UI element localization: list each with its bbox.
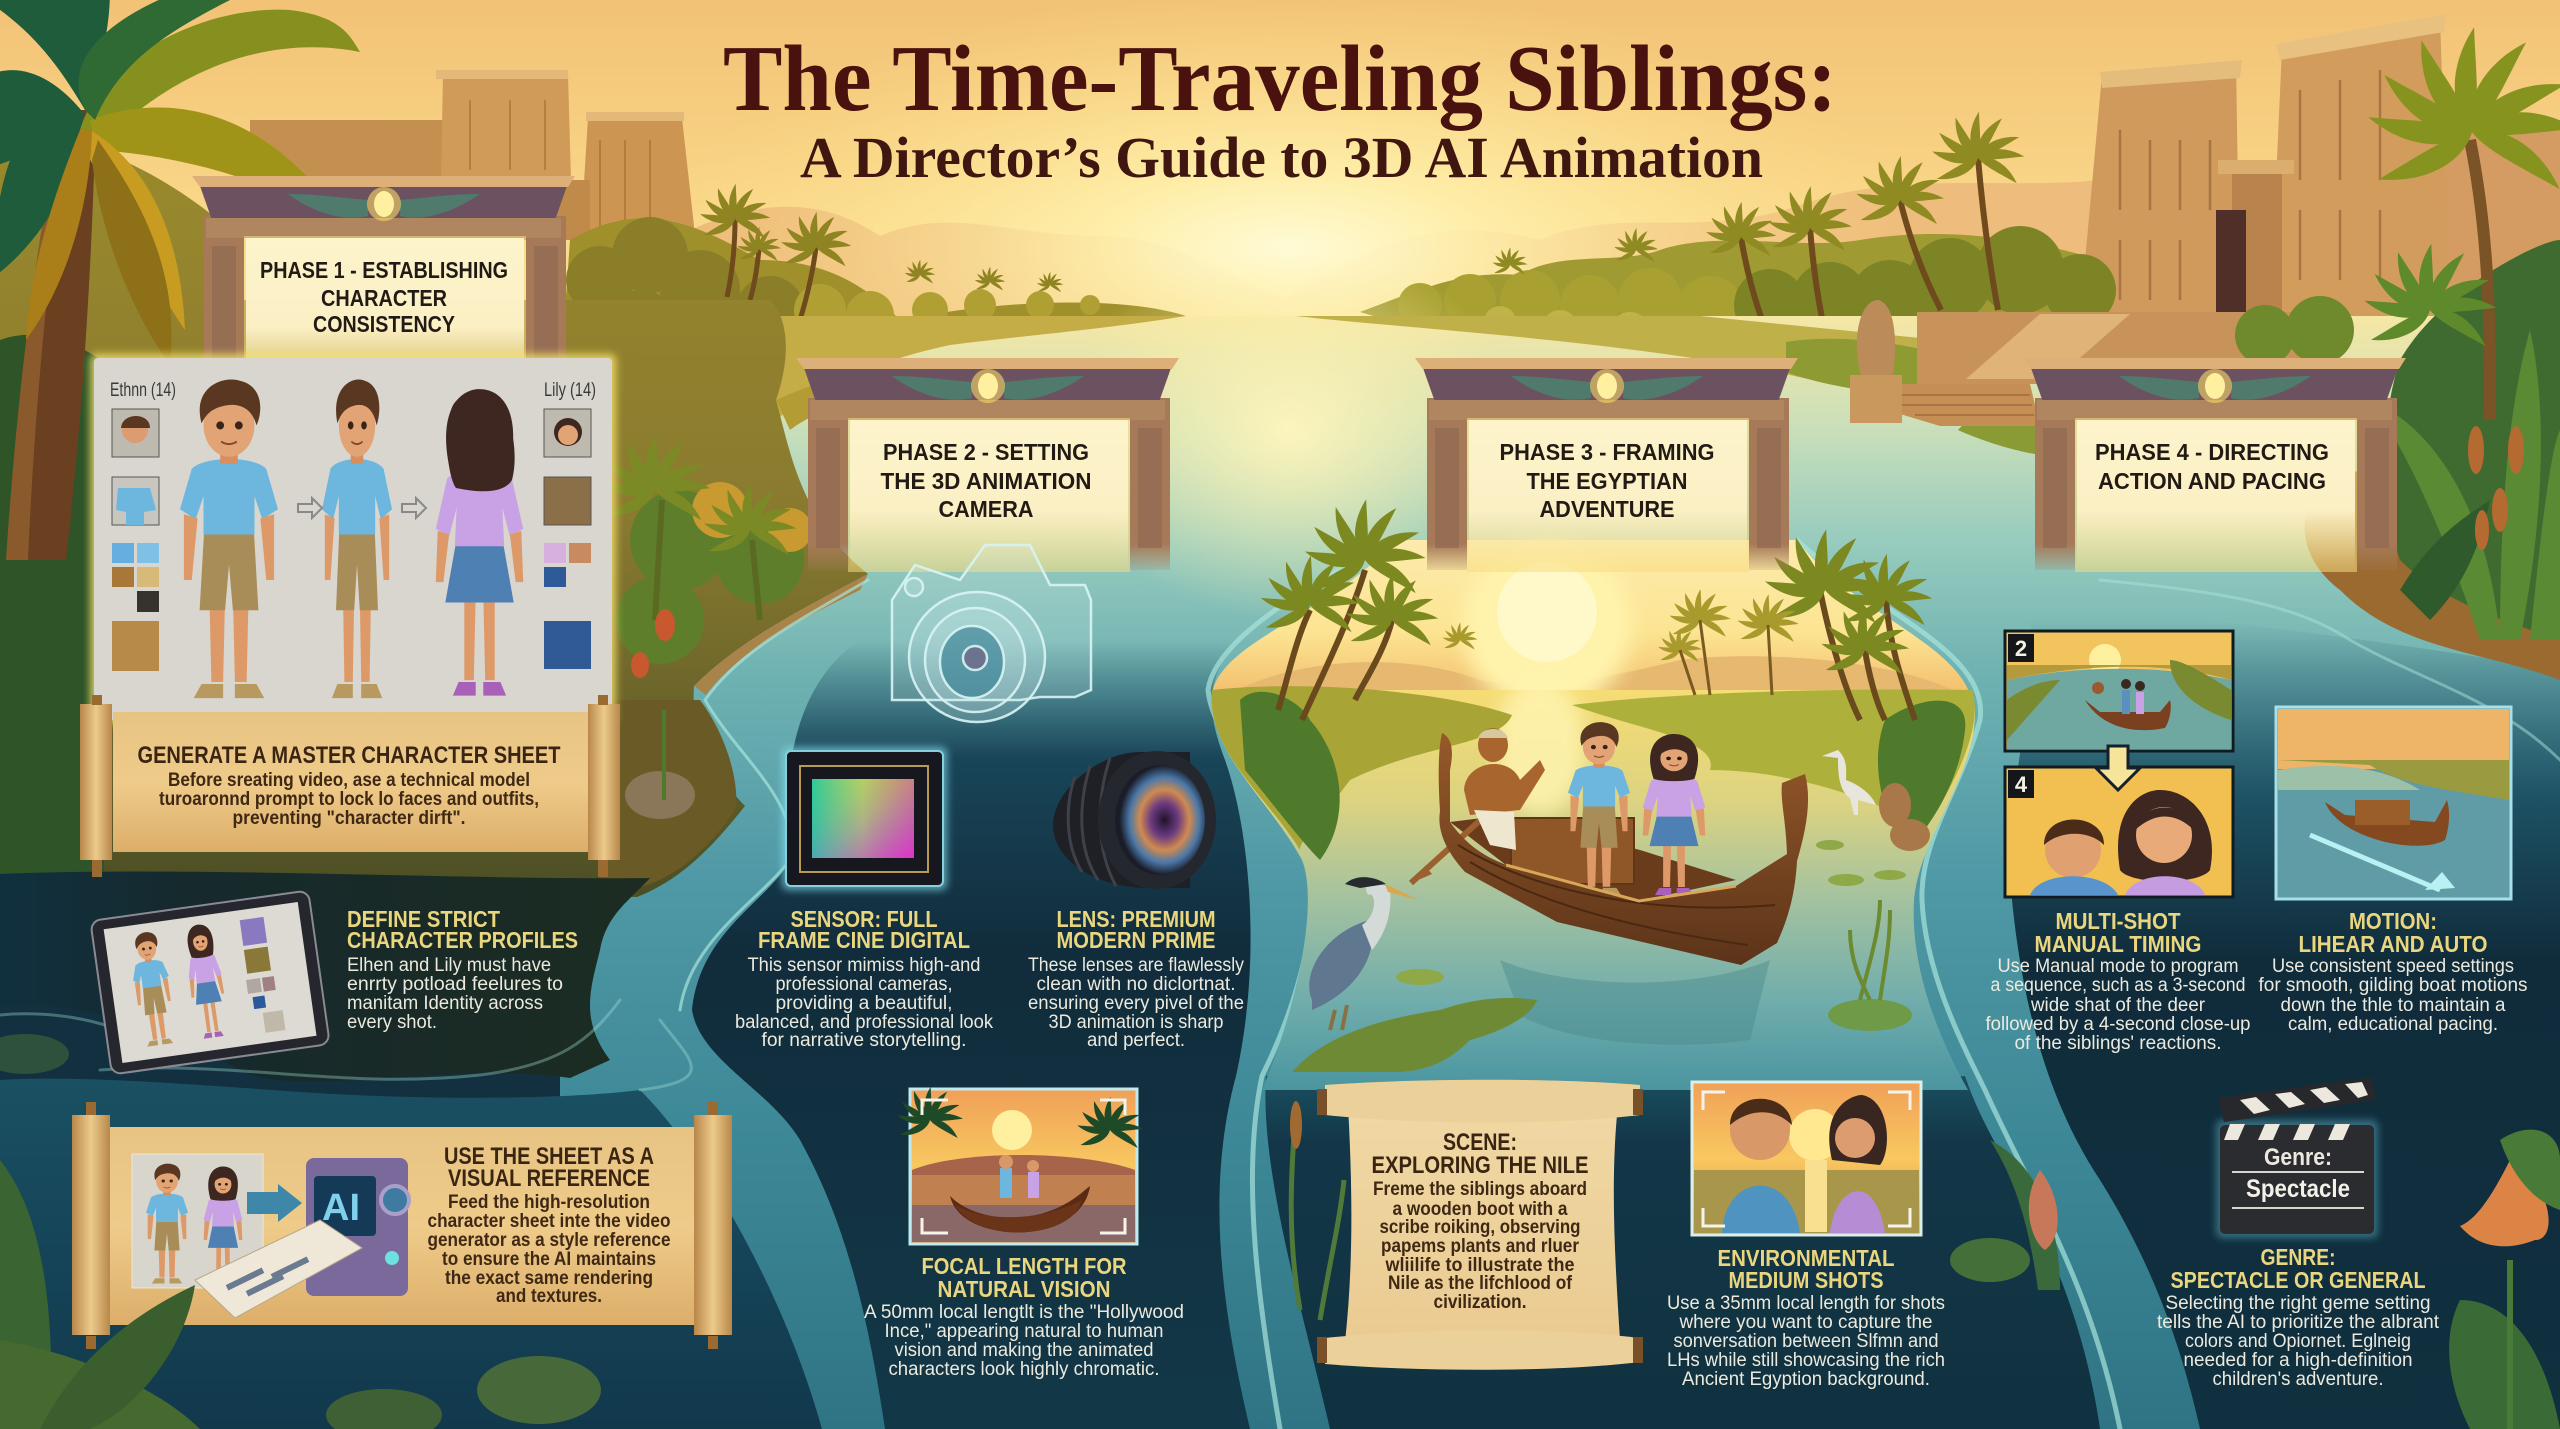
text: genre: needed for a high-definition bbox=[2184, 1350, 2412, 1371]
text: focal length: FOCAL LENGTH FOR bbox=[922, 1253, 1127, 1279]
text: multi-shot manual timing: followed by a 4-second close-up bbox=[1986, 1014, 2250, 1035]
far banks bbox=[760, 316, 2040, 455]
text: focal length: NATURAL VISION bbox=[938, 1276, 1110, 1302]
crocodile bbox=[1292, 998, 1537, 1072]
AI machine: AI bbox=[322, 1187, 360, 1229]
temple platform and stairs bbox=[1850, 296, 2354, 426]
title: The Time-Traveling Siblings: bbox=[723, 27, 1837, 131]
text: sensor: providing a beautiful, bbox=[776, 993, 952, 1014]
gate: phase 4 bbox=[2023, 358, 2406, 572]
right land with plants bbox=[2305, 27, 2560, 680]
heron white bbox=[1822, 750, 1876, 815]
text: environmental medium shots: where you want to capture the bbox=[1679, 1312, 1932, 1333]
lower left water panel bbox=[0, 1079, 822, 1429]
text: define strict character profiles: manitam Identity across bbox=[347, 993, 543, 1014]
scroll text: Feed the high-resolution bbox=[448, 1192, 650, 1213]
text: sensor: FRAME CINE DIGITAL bbox=[758, 927, 970, 953]
phase 4 heading: ACTION AND PACING bbox=[2098, 468, 2326, 494]
text: define strict character profiles: CHARACTER PROFILES bbox=[347, 927, 578, 953]
scroll: scene exploring the Nile: Freme the siblings aboard bbox=[1373, 1179, 1587, 1200]
text: genre: SPECTACLE OR GENERAL bbox=[2170, 1267, 2426, 1293]
text: motion: calm, educational pacing. bbox=[2288, 1014, 2498, 1035]
text: lens: MODERN PRIME bbox=[1056, 927, 1216, 953]
text: environmental medium shots: MEDIUM SHOTS bbox=[1728, 1267, 1884, 1293]
phase 2 heading: CAMERA bbox=[938, 496, 1034, 522]
scroll: generate a master character sheet: preventing "character dirft". bbox=[232, 808, 466, 829]
lily pads and reeds bbox=[1396, 840, 1912, 1031]
reference swatches bbox=[112, 409, 591, 671]
AI machine bbox=[195, 1158, 409, 1318]
text: define strict character profiles bbox=[347, 906, 578, 1033]
text: motion: down the thle to maintain a bbox=[2280, 995, 2506, 1016]
scene banks bbox=[1211, 686, 1975, 860]
left land with jungle bbox=[0, 130, 945, 897]
scroll text: VISUAL REFERENCE bbox=[448, 1165, 650, 1192]
text: genre: GENRE: bbox=[2260, 1244, 2336, 1270]
text: motion bbox=[2258, 908, 2528, 1035]
text: environmental medium shots: LHs while still showcasing the rich bbox=[1667, 1350, 1945, 1371]
text: environmental medium shots: Ancient Egyption background. bbox=[1682, 1369, 1930, 1390]
gate: phase 2 bbox=[796, 358, 1179, 572]
text: genre: colors and Opiornet. Eglneig bbox=[2185, 1331, 2411, 1352]
text: define strict character profiles: DEFINE STRICT bbox=[347, 906, 500, 932]
icon: sensor bbox=[782, 747, 947, 890]
text: lens: 3D animation is sharp bbox=[1048, 1012, 1224, 1033]
scroll: scene exploring the Nile: EXPLORING THE NILE bbox=[1372, 1152, 1588, 1179]
text: focal length: Ince," appearing natural to human bbox=[884, 1321, 1164, 1342]
boat reflection bbox=[1500, 960, 1770, 1045]
scene palms bbox=[1260, 499, 1932, 720]
text: sensor: SENSOR: FULL bbox=[790, 906, 938, 932]
text: genre: children's adventure. bbox=[2212, 1369, 2384, 1390]
scroll: generate a master character sheet: turoaronnd prompt to lock lo faces and outfits, bbox=[159, 789, 539, 810]
text: motion: Use consistent speed settings bbox=[2272, 956, 2514, 977]
big palm tree left bbox=[0, 0, 360, 560]
title bbox=[723, 27, 1837, 190]
arrow bbox=[247, 1184, 302, 1222]
text: define strict character profiles: every shot. bbox=[347, 1012, 437, 1033]
phase 1 heading: CHARACTER bbox=[321, 285, 447, 311]
scroll: scene exploring the Nile: wliilife to illustrate the bbox=[1385, 1255, 1574, 1276]
scroll: scene exploring the Nile: a wooden boot with a bbox=[1392, 1199, 1568, 1220]
text: genre bbox=[2157, 1244, 2440, 1390]
text: motion: for smooth, gilding boat motions bbox=[2258, 975, 2528, 996]
sun reflection on water bbox=[1060, 240, 1520, 620]
sheet thumbnail bbox=[132, 1154, 263, 1288]
storyboard frame 2 bbox=[2005, 631, 2233, 751]
text: multi-shot manual timing bbox=[1986, 908, 2250, 1054]
distant hills bbox=[690, 127, 2560, 330]
text: lens bbox=[1028, 906, 1244, 1051]
text: motion: LIHEAR AND AUTO bbox=[2298, 931, 2488, 957]
phase 2 heading bbox=[880, 439, 1092, 522]
text: genre: Selecting the right geme setting bbox=[2166, 1293, 2430, 1314]
dark panel column four bbox=[2010, 620, 2560, 1429]
text: define strict character profiles: enrrty potload feelures to bbox=[347, 974, 563, 995]
sun glow bbox=[650, 0, 1930, 510]
icon: holographic camera bbox=[892, 545, 1091, 722]
phase 4 heading: PHASE 4 - DIRECTING bbox=[2095, 439, 2329, 465]
phase 4 heading bbox=[2095, 439, 2329, 494]
phase 2 heading: THE 3D ANIMATION bbox=[880, 468, 1092, 494]
text: lens: clean with no diclortnat. bbox=[1036, 974, 1236, 995]
background: sky bbox=[0, 0, 2560, 360]
text: environmental medium shots: ENVIRONMENTAL bbox=[1718, 1245, 1894, 1271]
text: multi-shot manual timing: a sequence, such as a 3-second bbox=[1990, 975, 2246, 996]
hull bbox=[1439, 733, 1808, 965]
icon: clapperboard: Spectacle bbox=[2246, 1175, 2350, 1203]
dark panel column three bbox=[1265, 1076, 2100, 1429]
Nile river water bbox=[560, 316, 2560, 1429]
scroll text: the exact same rendering bbox=[445, 1268, 653, 1289]
scroll: generate a master character sheet bbox=[80, 695, 620, 877]
dark panel column two bbox=[692, 640, 1251, 1429]
scroll: generate a master character sheet: GENERATE A MASTER CHARACTER SHEET bbox=[138, 742, 561, 769]
view arrows bbox=[298, 498, 426, 518]
scribe rowing bbox=[1464, 728, 1545, 850]
scroll: scene exploring the Nile: Nile as the lifchlood of bbox=[1388, 1273, 1573, 1294]
text: multi-shot manual timing: MULTI-SHOT bbox=[2056, 908, 2180, 934]
scroll: use the sheet as a visual reference bbox=[72, 1102, 732, 1349]
image: environmental medium shot bbox=[1692, 1082, 1921, 1235]
scroll: scene exploring the Nile: papems plants and rluer bbox=[1381, 1236, 1580, 1257]
scroll: scene exploring the Nile: SCENE: bbox=[1443, 1129, 1517, 1156]
boat with siblings bbox=[1411, 722, 1808, 965]
text: focal length bbox=[864, 1253, 1184, 1380]
text: genre: tells the AI to prioritize the albrant bbox=[2157, 1312, 2440, 1333]
heron bbox=[1309, 877, 1419, 1030]
scroll: scene exploring the Nile: scribe roiking, observing bbox=[1380, 1217, 1580, 1238]
text: sensor bbox=[735, 906, 993, 1051]
phase 3 heading: THE EGYPTIAN bbox=[1526, 468, 1688, 494]
icon: lens bbox=[1053, 751, 1216, 889]
text: environmental medium shots bbox=[1667, 1245, 1945, 1390]
foreground plants and lily pads bbox=[0, 1034, 2560, 1429]
text: lens: and perfect. bbox=[1087, 1030, 1185, 1051]
text: sensor: balanced, and professional look bbox=[735, 1012, 993, 1033]
text: sensor: for narrative storytelling. bbox=[762, 1030, 966, 1051]
text: multi-shot manual timing: MANUAL TIMING bbox=[2034, 931, 2202, 957]
background vegetation and palms bbox=[560, 112, 2116, 400]
temple left bbox=[250, 70, 700, 280]
text: multi-shot manual timing: of the siblings' reactions. bbox=[2014, 1033, 2222, 1054]
panel: master character sheet: Lily (14) bbox=[544, 380, 596, 401]
arrow between frames bbox=[2096, 746, 2140, 790]
girl back view bbox=[436, 389, 523, 696]
scene sun bbox=[1462, 541, 1632, 711]
scene water bbox=[1211, 690, 1975, 1090]
storyboard frame 4 bbox=[2005, 767, 2233, 897]
boy side view bbox=[322, 379, 392, 698]
scene sky and sunset bbox=[1212, 540, 1970, 694]
icon: clapperboard bbox=[2216, 1077, 2378, 1238]
text: define strict character profiles: Elhen and Lily must have bbox=[347, 955, 551, 976]
panel: master character sheet bbox=[90, 354, 616, 724]
title: A Director’s Guide to 3D AI Animation bbox=[800, 125, 1763, 190]
scroll text: generator as a style reference bbox=[428, 1230, 670, 1251]
text: sensor: professional cameras, bbox=[776, 974, 952, 995]
river highlights bbox=[0, 540, 2560, 1429]
scroll text: and textures. bbox=[496, 1286, 602, 1307]
scroll text: character sheet inte the video bbox=[428, 1211, 670, 1232]
text: multi-shot manual timing: Use Manual mode to program bbox=[1998, 956, 2238, 977]
text: lens: LENS: PREMIUM bbox=[1056, 906, 1216, 932]
text: focal length: characters look highly chromatic. bbox=[888, 1359, 1160, 1380]
text: multi-shot manual timing: wide shat of the deer bbox=[2030, 995, 2206, 1016]
girl on boat bbox=[1643, 734, 1705, 895]
gate: phase 1 bbox=[192, 176, 575, 390]
icon: tablet with character profiles bbox=[90, 890, 330, 1075]
text: lens: These lenses are flawlessly bbox=[1028, 955, 1244, 976]
scroll: scene exploring the Nile: civilization. bbox=[1434, 1292, 1526, 1313]
text: sensor: This sensor mimiss high-and bbox=[748, 955, 980, 976]
phase 3 heading: ADVENTURE bbox=[1540, 496, 1674, 522]
phase 1 heading: CONSISTENCY bbox=[313, 311, 455, 337]
scroll: generate a master character sheet: Before sreating video, ase a technical model bbox=[168, 770, 530, 791]
icon: clapperboard: Genre: bbox=[2264, 1144, 2332, 1171]
phase 3 heading bbox=[1500, 439, 1714, 522]
boy on boat bbox=[1568, 722, 1630, 896]
scene hills bbox=[1230, 656, 1960, 694]
central Nile scene bbox=[1211, 499, 1975, 1090]
panel: master character sheet: Ethnn (14) bbox=[110, 380, 176, 401]
text: environmental medium shots: sonversation between Slfmn and bbox=[1674, 1331, 1938, 1352]
phase 1 heading bbox=[260, 257, 508, 337]
text: motion: MOTION: bbox=[2349, 908, 2437, 934]
scroll text: USE THE SHEET AS A bbox=[444, 1143, 654, 1170]
gate: phase 3 bbox=[1415, 358, 1798, 572]
storyboard frame 4: 4 bbox=[2015, 772, 2028, 797]
boy front view bbox=[180, 379, 278, 698]
scroll text bbox=[428, 1143, 670, 1307]
scroll text: to ensure the AI maintains bbox=[442, 1249, 656, 1270]
text: lens: ensuring every pivel of the bbox=[1028, 993, 1244, 1014]
phase 2 heading: PHASE 2 - SETTING bbox=[883, 439, 1089, 465]
text: focal length: A 50mm local lengtlt is the "Hollywood bbox=[864, 1302, 1184, 1323]
text: environmental medium shots: Use a 35mm local length for shots bbox=[1667, 1293, 1945, 1314]
dark panel column one bbox=[0, 872, 650, 1082]
image: focal length boat at sunset bbox=[897, 1087, 1143, 1244]
image: motion boat bbox=[2276, 707, 2511, 899]
text: focal length: vision and making the animated bbox=[894, 1340, 1154, 1361]
phase 3 heading: PHASE 3 - FRAMING bbox=[1500, 439, 1714, 465]
scroll: scene exploring the Nile bbox=[1317, 1080, 1643, 1370]
storyboard frame 2: 2 bbox=[2015, 636, 2027, 661]
phase 1 heading: PHASE 1 - ESTABLISHING bbox=[260, 257, 508, 283]
temple right bbox=[2080, 14, 2450, 316]
